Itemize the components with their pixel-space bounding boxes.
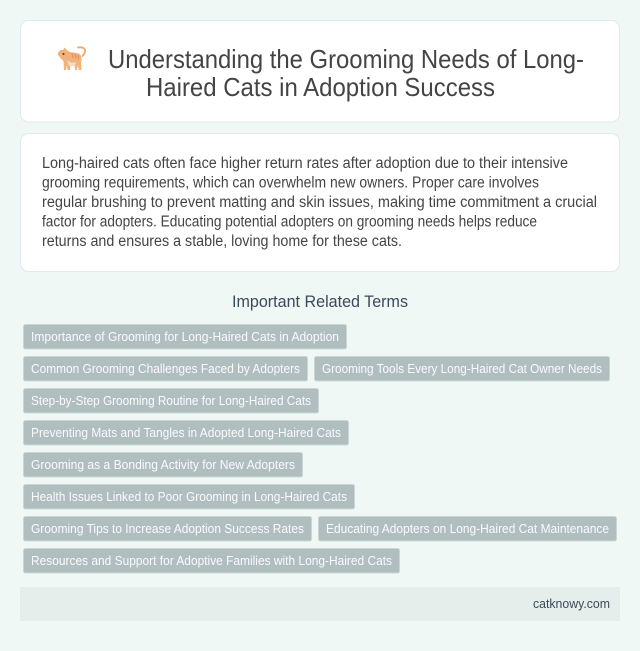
panel: description (20, 134, 620, 272)
tag (24, 356, 308, 381)
tag: Step-by-Step Grooming Routine for Long-Haired Cats (31, 393, 311, 408)
tag (24, 548, 400, 573)
tag (24, 324, 346, 349)
title: Understanding the Grooming Needs of Long- (108, 44, 584, 74)
tag: Resources and Support for Adoptive Families with Long-Haired Cats (31, 553, 392, 568)
tag: Health Issues Linked to Poor Grooming in Long-Haired Cats (31, 489, 347, 504)
panel: title card (20, 20, 620, 122)
tag (24, 484, 354, 509)
tag (318, 516, 616, 541)
tag: Grooming Tools Every Long-Haired Cat Owner Needs (322, 361, 602, 376)
tag: Grooming Tips to Increase Adoption Success Rates (31, 521, 304, 536)
tag (24, 420, 348, 445)
text block: description: returns and ensures a stable, loving home for these cats. (42, 233, 402, 250)
text block: description: Long-haired cats often face higher return rates after adoption due to their intensive (42, 155, 568, 172)
tag: Preventing Mats and Tangles in Adopted Long-Haired Cats (31, 425, 341, 440)
title: Haired Cats in Adoption Success (146, 72, 495, 102)
tag: Importance of Grooming for Long-Haired Cats in Adoption (31, 329, 339, 344)
tag list (24, 324, 616, 573)
tag (24, 452, 302, 477)
footer (20, 587, 620, 621)
tag: Common Grooming Challenges Faced by Adopters (31, 361, 300, 376)
tag (24, 388, 318, 413)
text block: description: regular brushing to prevent matting and skin issues, making time commitment a crucial (42, 194, 597, 211)
tag (314, 356, 610, 381)
text block: description: factor for adopters. Educating potential adopters on grooming needs helps reduce (42, 214, 537, 230)
icon: cat (58, 47, 85, 70)
text block: description: grooming requirements, which can overwhelm new owners. Proper care involves (42, 174, 539, 192)
tag: Grooming as a Bonding Activity for New Adopters (31, 457, 295, 472)
footer: catknowy.com (533, 596, 610, 611)
tag: Educating Adopters on Long-Haired Cat Maintenance (326, 521, 609, 536)
heading: important related terms: Important Related Terms (232, 293, 408, 311)
title (108, 44, 584, 102)
tag (24, 516, 312, 541)
text block: description (42, 155, 597, 250)
